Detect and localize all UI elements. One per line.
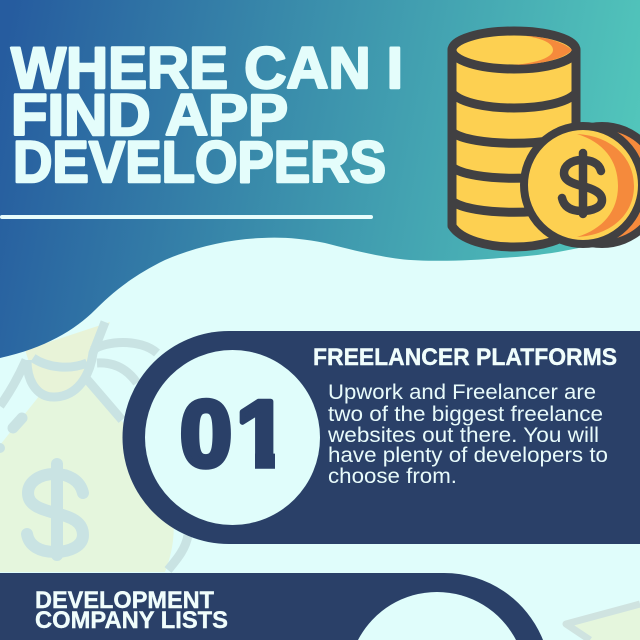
panel heading: COMPANY LISTS (35, 607, 228, 634)
icon: front coin (524, 126, 640, 244)
panel body text: two of the biggest freelance (328, 403, 603, 426)
panel body text (327, 381, 608, 488)
watermark: envelope corner (566, 604, 640, 640)
icon: dollar sign (562, 153, 602, 214)
number circle (145, 350, 320, 525)
panel heading (35, 587, 228, 634)
watermark dollar sign (27, 464, 83, 555)
panel body text: choose from. (328, 465, 457, 488)
watermark: money bag (0, 322, 188, 572)
panel body text: websites out there. You will (327, 424, 599, 447)
icon: stack of coins (452, 31, 640, 247)
number 01: 1 (236, 381, 288, 486)
icon: back coin (592, 122, 640, 248)
title: FIND APP (11, 83, 288, 148)
panel heading: DEVELOPMENT (35, 587, 214, 614)
panel heading: FREELANCER PLATFORMS (313, 344, 617, 371)
title (11, 36, 403, 195)
panel 2: development company lists (0, 573, 543, 640)
title: DEVELOPERS (13, 130, 386, 195)
panel body text: Upwork and Freelancer are (328, 381, 596, 404)
number circle (358, 592, 516, 640)
panel body text: have plenty of developers to (328, 444, 608, 467)
number 01 (180, 398, 275, 470)
number 01: 0 (180, 381, 232, 486)
title: WHERE CAN I (11, 36, 403, 101)
title underline (0, 215, 373, 219)
panel 1: freelancer platforms (122, 331, 640, 544)
header wave with gradient (0, 0, 640, 358)
